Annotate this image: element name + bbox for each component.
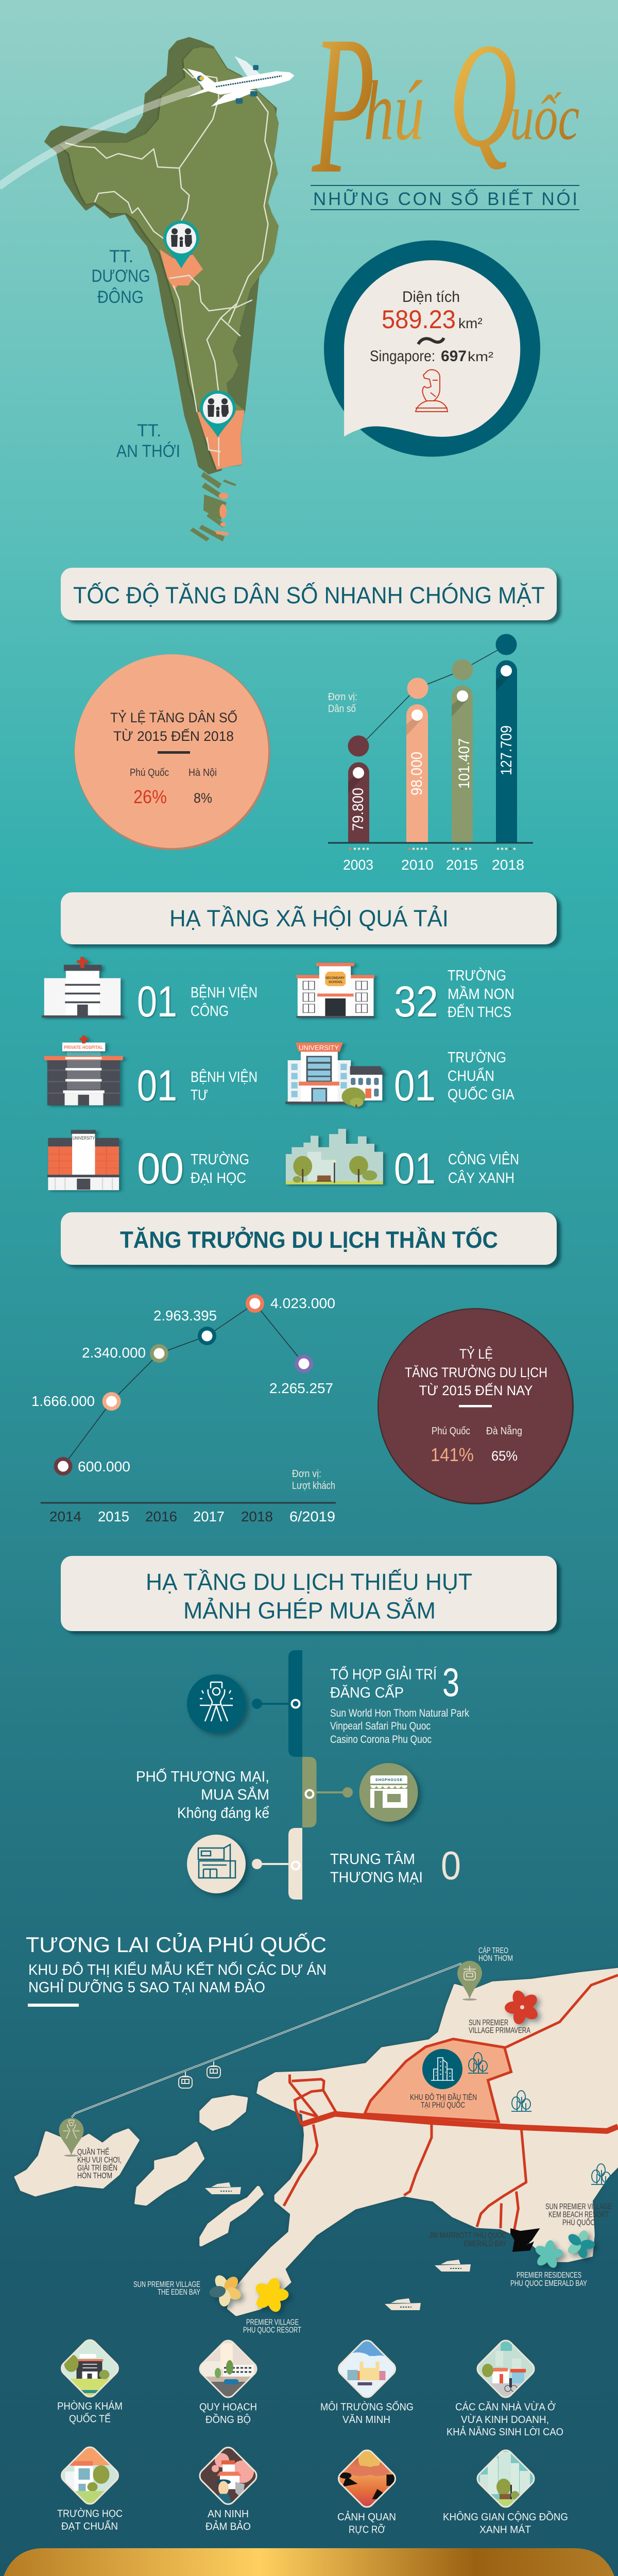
icon: tilde [418, 338, 444, 344]
label: cable car: CÁP TREO [478, 1945, 508, 1955]
number: 589.23 km2: 589.23 [382, 305, 456, 334]
card: shophouses: KHẢ NĂNG SINH LỜI CAO [447, 2426, 563, 2438]
panel: tourism growth rate [377, 1308, 574, 1504]
icon: teal flower [534, 2240, 563, 2269]
icon: pin An Thoi [200, 391, 236, 437]
icon: secondary school: SCHOOL [329, 980, 343, 984]
axis years: 2015 [446, 857, 478, 873]
title: uốc [510, 82, 579, 154]
icon: pin cable car [457, 1961, 482, 2001]
heading: tourism growth [61, 1212, 557, 1265]
text: area: Diện tích [402, 289, 460, 306]
speech bubble [344, 260, 520, 437]
card: security [199, 2447, 258, 2530]
icon: teal gradient flower [566, 2229, 595, 2259]
icon: university [47, 1130, 119, 1190]
icon: gondola 2 [179, 2072, 192, 2088]
label: Premier Residences: PHU QUOC EMERALD BAY [510, 2279, 587, 2288]
card: shophouses: CÁC CĂN NHÀ VỪA Ở [455, 2401, 556, 2413]
panel: area comparison [324, 240, 540, 456]
text: university: TRƯỜNG [191, 1151, 249, 1168]
icon: merlion [416, 370, 448, 412]
label: Hon Thom complex: HÒN THƠM [77, 2171, 112, 2180]
number: 0: 0 [441, 1842, 461, 1888]
axis years: 2017 [193, 1509, 225, 1524]
number: 01 park: 01 [394, 1144, 436, 1193]
point 2017: 2.963.395 [153, 1308, 217, 1324]
text: malls: TRUNG TÂM [330, 1851, 415, 1868]
text: Phu Quoc: Phú Quốc [432, 1426, 470, 1437]
number: 01 national school: 01 [394, 1061, 436, 1110]
item: shopping streets [136, 1757, 418, 1827]
text: public hospital: CÔNG [191, 1002, 229, 1020]
point 6/2019: 2.265.257 [269, 1380, 333, 1396]
bar 2010 [406, 678, 428, 843]
text: schools: TRƯỜNG [448, 967, 506, 984]
card: civilized environment: MÔI TRƯỜNG SỐNG [320, 2401, 414, 2413]
card: standard schools [57, 2444, 123, 2532]
subheading: KHU ĐÔ THỊ KIỂU MẪU KẾT NỐI CÁC DỰ ÁN [28, 1961, 327, 1978]
text: negligible: Không đáng kể [177, 1805, 269, 1822]
number: 141%: 141% [431, 1444, 474, 1465]
axis years: 2003 [343, 857, 373, 873]
icon: gondola 1 [207, 2061, 220, 2078]
label: JW Marriott: EMERALD BAY [464, 2240, 506, 2248]
title: hú [364, 63, 424, 158]
card: standard schools: TRƯỜNG HỌC [57, 2508, 123, 2519]
roads [284, 1975, 618, 2230]
axis years: 2015 [98, 1509, 129, 1524]
text: Singapore: Singapore: [370, 348, 435, 365]
subheading: NGHỈ DƯỠNG 5 SAO TẠI NAM ĐẢO [28, 1978, 265, 1996]
card: landscape [338, 2449, 396, 2535]
icon: shophouse [370, 1775, 407, 1809]
list: complexes: Casino Corona Phu Quoc [330, 1734, 432, 1745]
label: Hon Thom complex: GIẢI TRÍ BIỂN [77, 2163, 117, 2173]
heading: tourism infrastructure [61, 1556, 557, 1631]
card: synchronized planning: ĐỒNG BỘ [205, 2413, 251, 2426]
icon: zipline figure [200, 1682, 233, 1721]
point 2015 [31, 1392, 121, 1411]
subtitle: NHỮNG CON SỐ BIẾT NÓI [313, 189, 577, 209]
card: green public space: XANH MÁT [479, 2523, 531, 2535]
point 2015: 1.666.000 [31, 1393, 95, 1409]
label: An Thoi: TT. [137, 421, 161, 440]
heading: future of Phu Quoc: TƯƠNG LAI CỦA PHÚ QUỐC [26, 1932, 327, 1957]
item: entertainment complexes [187, 1650, 469, 1757]
arc: flight path [0, 89, 201, 187]
axis years: 2018 [492, 857, 524, 873]
heading: social infrastructure: HẠ TẦNG XÃ HỘI QUÁ TẢI [169, 905, 449, 931]
text: park: CÂY XANH [448, 1170, 514, 1187]
icon: pin entertainment [59, 2118, 83, 2157]
text: Ha Noi: Hà Nội [188, 767, 217, 778]
icon: trees 3 [591, 2164, 611, 2184]
text: public hospital: BỆNH VIỆN [191, 984, 258, 1001]
label: Duong Dong: DƯƠNG [92, 266, 150, 286]
label: Primavera: VILLAGE PRIMAVERA [469, 2026, 530, 2035]
label: Kem Beach: PHÚ QUỐC [562, 2217, 595, 2227]
icon: airplane [186, 56, 295, 107]
icon: private hospital: PRIVATE HOSPITAL [64, 1045, 103, 1050]
axis years: 6/2019 [289, 1509, 335, 1524]
map: Phu Quoc island [45, 38, 279, 541]
map: southern Phu Quoc [16, 1945, 618, 2335]
icon: ship 3 [385, 2298, 421, 2310]
heading: tourism growth: TĂNG TRƯỞNG DU LỊCH THẦN TỐC [120, 1227, 498, 1253]
number: 01 private hospital: 01 [137, 1061, 177, 1110]
title: P [311, 0, 375, 215]
icon: national standard school [285, 1043, 384, 1107]
text: complexes: ĐĂNG CẤP [330, 1684, 404, 1701]
list: complexes: Vinpearl Safari Phu Quoc [330, 1720, 431, 1732]
point 6/2019 [269, 1354, 333, 1396]
icon: pale flower [208, 2273, 243, 2307]
heading: future of Phu Quoc [26, 1932, 327, 2007]
label: first urban area: KHU ĐÔ THỊ ĐẦU TIÊN [410, 2092, 477, 2102]
footer: gold band [0, 2548, 618, 2576]
text: Da Nang: Đà Nẵng [486, 1425, 522, 1437]
card: synchronized planning [199, 2340, 258, 2425]
text: malls: THƯƠNG MẠI [330, 1870, 423, 1886]
card: international clinic: PHÒNG KHÁM [57, 2400, 123, 2412]
text: Singapore: 697 [441, 348, 467, 365]
icon: ship 1 [205, 2182, 241, 2194]
land masses [16, 1969, 618, 2315]
heading: tourism infrastructure: MẢNH GHÉP MUA SẮM [183, 1597, 436, 1624]
label: An Thoi: AN THỚI [116, 442, 180, 461]
number: 3: 3 [442, 1659, 459, 1705]
bar 2018: 127.709 [498, 725, 515, 775]
unit note: Đơn vị: [292, 1468, 321, 1480]
axis years: 2014 [49, 1509, 81, 1524]
card: civilized environment [320, 2337, 414, 2426]
icon: national standard school: UNIVERSITY [299, 1044, 339, 1052]
unit note: Dân số [328, 703, 356, 715]
card: security: ĐẢM BẢO [205, 2520, 251, 2533]
text: rate heading: TỶ LỆ [459, 1345, 493, 1362]
text: schools: MẦM NON [448, 985, 514, 1003]
panel: island map [0, 38, 295, 541]
card: landscape: RỰC RỠ [349, 2523, 385, 2535]
point 2014: 600.000 [78, 1459, 130, 1475]
label: JW Marriott: JW MARRIOTT PHU QUOC [429, 2231, 506, 2240]
title: Q [449, 12, 517, 178]
label: Hon Thom complex: KHU VUI CHƠI, [77, 2156, 122, 2165]
chart: tourist arrivals line [31, 1294, 336, 1524]
number: 589.23 km2: km² [458, 315, 483, 331]
point 2014 [54, 1457, 130, 1476]
label: Eden Bay: THE EDEN BAY [158, 2288, 200, 2297]
icon: griffin [510, 2228, 540, 2252]
card: green public space [443, 2447, 568, 2535]
bar 2003: 79.800 [350, 788, 367, 831]
card: civilized environment: VĂN MINH [342, 2414, 390, 2426]
unit note: Đơn vị: [328, 691, 357, 703]
text: national school: CHUẨN [448, 1067, 494, 1084]
text: rate heading: TĂNG TRƯỞNG DU LỊCH [405, 1364, 547, 1380]
icon: secondary school: SECONDARY [325, 976, 345, 980]
point 2016: 2.340.000 [82, 1345, 146, 1361]
label: Premier Residences: PREMIER RESIDENCES [517, 2271, 581, 2280]
card: landscape: CẢNH QUAN [337, 2511, 396, 2523]
axis years: 2010 [401, 857, 434, 873]
number: 26%: 26% [133, 786, 167, 807]
list: complexes: Sun World Hon Thom Natural Park [330, 1707, 469, 1719]
card: security: AN NINH [208, 2509, 249, 2520]
number: 65%: 65% [491, 1448, 518, 1464]
label: Duong Dong: TT. [109, 247, 133, 266]
panel: social infrastructure items [42, 957, 519, 1193]
panel: tourism infrastructure timeline [136, 1650, 469, 1900]
text: national school: QUỐC GIA [448, 1086, 515, 1103]
icon: yellow flower [253, 2277, 289, 2314]
card: shophouses [447, 2337, 563, 2438]
text: Singapore: km² [468, 349, 493, 364]
icon: shophouse: SHOPHOUSE [375, 1778, 402, 1782]
text: private hospital: BỆNH VIỆN [191, 1069, 258, 1086]
number: 32 schools: 32 [394, 977, 438, 1026]
icon: pin Duong Dong [163, 221, 199, 268]
text: national school: TRƯỜNG [448, 1049, 506, 1066]
icon: park [286, 1129, 383, 1184]
icon: mall [198, 1844, 235, 1878]
number: 8%: 8% [194, 790, 212, 806]
axis years: 2018 [241, 1509, 273, 1524]
label: Eden Bay: SUN PREMIER VILLAGE [133, 2280, 200, 2289]
bar 2015 [452, 659, 473, 843]
icon: secondary school [297, 963, 374, 1018]
item: shopping malls [187, 1828, 461, 1900]
text: university: ĐẠI HỌC [191, 1170, 246, 1187]
label: Premier Village: PREMIER VILLAGE [246, 2318, 299, 2327]
panel: amenities grid [57, 2337, 568, 2535]
panel: population growth rate [74, 654, 270, 850]
text: complexes: TỔ HỢP GIẢI TRÍ [330, 1666, 437, 1683]
icon: ship 2 [435, 2260, 471, 2272]
label: Premier Village: PHU QUOC RESORT [243, 2326, 301, 2335]
heading: social infrastructure [61, 892, 557, 944]
axis years [343, 857, 524, 873]
text: schools: ĐẾN THCS [448, 1003, 511, 1021]
icon: public hospital [42, 957, 124, 1018]
bar 2015: 101.407 [456, 738, 473, 789]
icon: university: UNIVERSITY [73, 1136, 95, 1141]
unit note: Lượt khách [292, 1480, 335, 1492]
point 2018 [246, 1294, 335, 1313]
label: first urban area: TẠI PHÚ QUỐC [421, 2099, 465, 2110]
bar 2010: 98.000 [408, 752, 425, 795]
number: 01 public hospital: 01 [137, 977, 177, 1026]
text: park: CÔNG VIÊN [448, 1150, 519, 1168]
text: rate heading: TỶ LỆ TĂNG DÂN SỐ [110, 709, 237, 725]
point 2018: 4.023.000 [270, 1295, 335, 1311]
axis years: 2016 [145, 1509, 177, 1524]
text: shopping streets: PHỐ THƯƠNG MẠI, [136, 1768, 269, 1785]
card: international clinic: QUỐC TẾ [69, 2413, 111, 2425]
label: Hon Thom complex: QUẦN THỂ [77, 2147, 109, 2157]
number: 00 university: 00 [137, 1144, 184, 1193]
title [311, 0, 579, 215]
chart: population bars [328, 634, 533, 873]
text: rate heading: TỪ 2015 ĐẾN NAY [419, 1382, 533, 1398]
heading: population: TỐC ĐỘ TĂNG DÂN SỐ NHANH CHÓNG MẶT [73, 582, 545, 608]
bar 2018 [495, 634, 517, 843]
heading: population [61, 568, 557, 620]
text: rate heading: TỪ 2015 ĐẾN 2018 [113, 728, 234, 744]
axis years [49, 1509, 335, 1524]
point 2016 [82, 1344, 168, 1363]
cable car line [72, 1963, 461, 2117]
icon: private hospital [44, 1036, 123, 1105]
card: standard schools: ĐẠT CHUẨN [61, 2520, 118, 2532]
icon: urban area [422, 2049, 462, 2089]
card: shophouses: VỪA KINH DOANH, [461, 2414, 549, 2426]
label: Primavera: SUN PREMIER [469, 2019, 508, 2027]
label: cable car: HÒN THƠM [478, 1953, 513, 1963]
card: synchronized planning: QUY HOẠCH [199, 2402, 257, 2413]
label: Duong Dong: ĐÔNG [97, 287, 144, 307]
icon: trees 1 [468, 2053, 488, 2073]
icon: trees 2 [511, 2091, 531, 2111]
point 2017 [153, 1308, 217, 1345]
text: Phu Quoc: Phú Quốc [130, 767, 169, 778]
zone: first urban area [365, 2039, 511, 2122]
card: green public space: KHÔNG GIAN CỘNG ĐỒNG [443, 2511, 568, 2523]
text: shopping streets: MUA SẮM [201, 1786, 269, 1803]
icon: red flower [505, 1989, 540, 2026]
bar 2003 [348, 736, 369, 843]
card: international clinic [57, 2337, 123, 2425]
text: private hospital: TƯ [191, 1087, 208, 1104]
heading: tourism infrastructure: HẠ TẦNG DU LỊCH THIẾU HỤT [146, 1569, 472, 1595]
